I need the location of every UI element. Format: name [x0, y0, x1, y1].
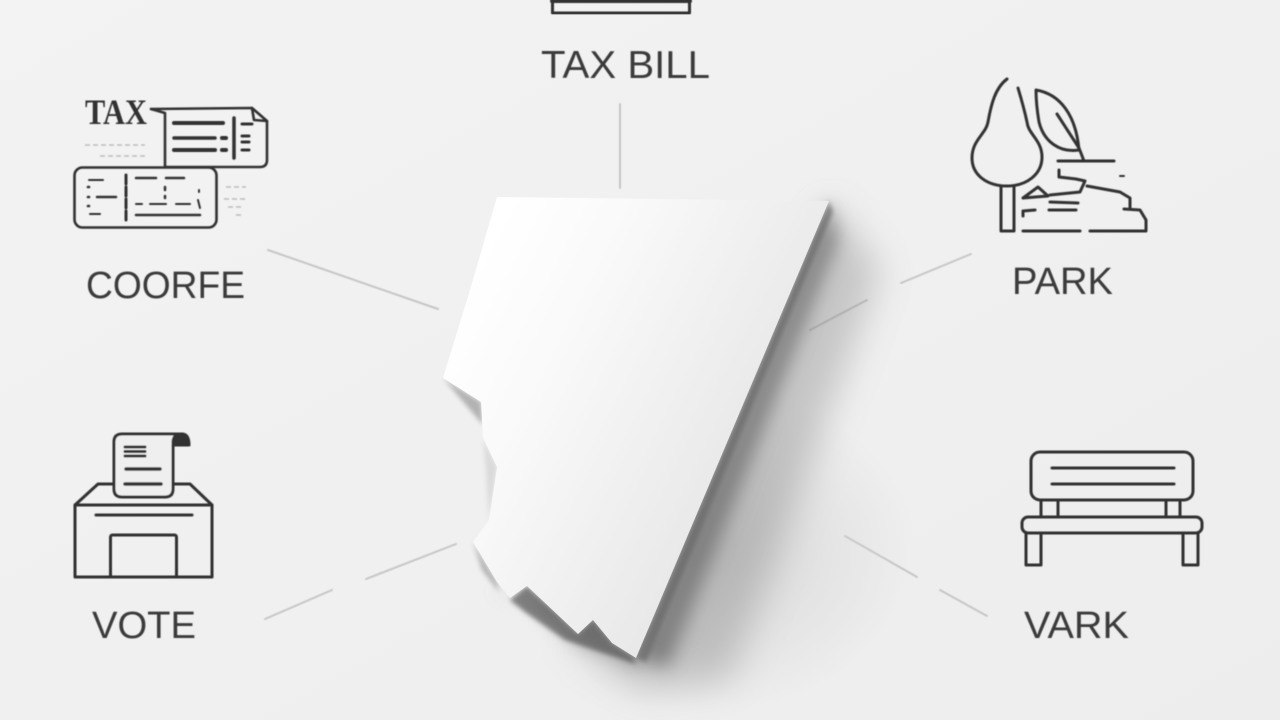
icon: tax documents — [74, 92, 267, 228]
icon: tax documents: TAX — [85, 92, 147, 132]
county map shape with shadow — [443, 197, 915, 714]
label: tax bill: TAX BILL — [541, 44, 710, 87]
connector lines — [265, 104, 987, 619]
label: coorfe: COORFE — [86, 265, 245, 307]
label: vark: VARK — [1024, 605, 1129, 647]
icon: park — [972, 79, 1146, 231]
icon: bench — [1022, 452, 1202, 565]
icon: tax bill (cropped at top) — [552, 0, 690, 13]
label: vote: VOTE — [92, 605, 196, 647]
label: park: PARK — [1012, 261, 1113, 303]
icon: ballot box — [75, 434, 212, 577]
